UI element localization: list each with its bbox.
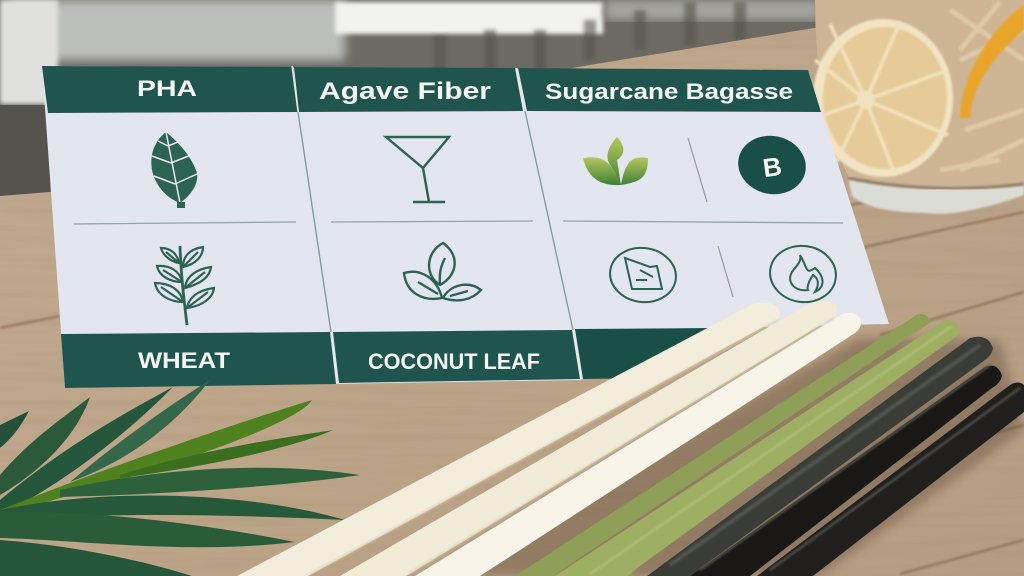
white straws <box>237 301 861 576</box>
card body <box>42 66 889 388</box>
green straws <box>515 314 961 576</box>
straw shadows <box>430 338 1024 576</box>
icon: leaf <box>151 132 197 208</box>
column dividers <box>74 66 843 383</box>
icon: green leaves <box>583 137 648 185</box>
panel header: PHA: PHA <box>137 76 197 101</box>
panel header: Agave Fiber: Agave Fiber <box>319 78 491 105</box>
panel footer: Wheat <box>61 332 336 388</box>
palm leaves <box>0 380 360 576</box>
panel header: Agave Fiber <box>294 67 523 112</box>
panel header: PHA <box>42 66 298 113</box>
icon: circle square <box>607 244 679 306</box>
icon: circle flame <box>766 242 840 306</box>
panel footer: Wheat: WHEAT <box>138 348 231 373</box>
icon: wheat sprig <box>155 246 214 325</box>
panel footer: Coconut Leaf <box>333 330 580 383</box>
icon: three leaves <box>404 243 481 300</box>
panel header: Sugarcane Bagasse: Sugarcane Bagasse <box>545 79 793 104</box>
panel footer: Coconut Leaf: COCONUT LEAF <box>368 349 540 374</box>
panel footer: third <box>575 328 715 379</box>
icon: cocktail glass <box>386 137 449 202</box>
label card <box>42 66 889 388</box>
icon: B badge: B <box>761 151 784 183</box>
glass with dried lemon slices <box>813 0 1024 214</box>
icon: B badge <box>733 130 811 200</box>
black straws <box>647 337 1024 576</box>
panel header: Sugarcane Bagasse <box>518 68 821 112</box>
